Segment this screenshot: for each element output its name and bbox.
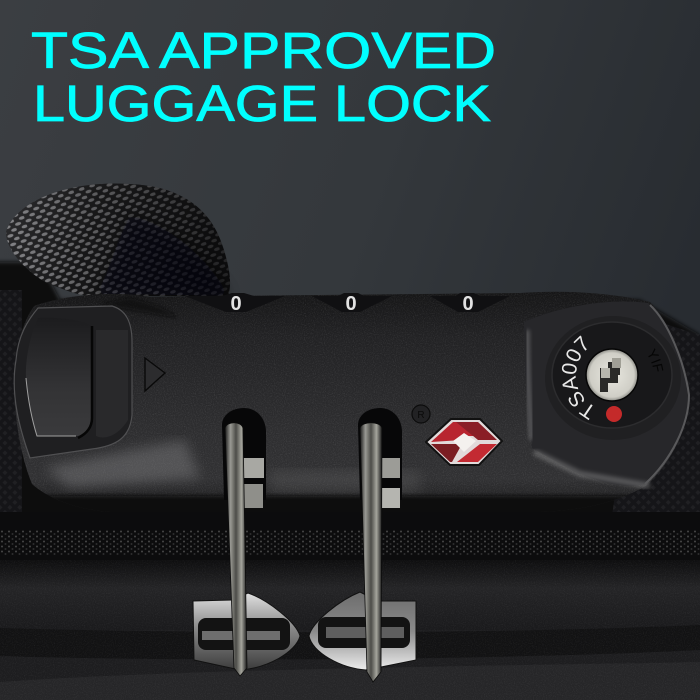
right shackle opening [358,408,402,500]
key cylinder dial [545,316,681,440]
dial window: third zero [430,293,510,315]
lock body: lower highlight band [45,440,200,488]
zipper pulls [193,592,416,670]
right shackle [360,423,382,682]
left shackle [225,423,247,676]
title [31,22,496,132]
right latch metal [382,458,400,508]
title: TSA APPROVED [31,22,496,79]
lock plate: raised key housing [524,302,689,486]
shackle slots and loops [222,408,402,682]
dial window: second zero: 0 [345,293,357,315]
zipper pull: right slider [309,592,416,670]
bag: lower leather panels [0,560,700,700]
dial window: first zero: 0 [230,293,242,315]
TSA logo: red diamond [426,419,502,465]
registered trademark mark [412,405,430,423]
zipper pull: left slot [198,618,290,650]
zipper pull: right slot [318,617,410,648]
title: LUGGAGE LOCK [33,75,491,132]
dial window: second zero [312,293,392,315]
left latch metal [243,458,264,508]
dial engraving: TSA007: TSA007 [562,336,593,420]
registered trademark mark: R [417,410,425,421]
bag: luggage fabric behind the lock [0,262,700,700]
zipper pull: left slider [193,593,300,670]
keyhole [586,349,638,401]
dial engraving: YIF: YIF [648,348,664,372]
arrow marker [145,358,165,391]
dial window: first zero [185,293,285,315]
bag: woven band under lock [0,512,700,560]
red indicator dot [606,406,622,422]
dial window: third zero: 0 [462,293,474,315]
left shackle opening [222,408,266,500]
strap: woven webbing top left [6,183,230,296]
slider button [14,306,132,458]
lock body [14,292,690,500]
